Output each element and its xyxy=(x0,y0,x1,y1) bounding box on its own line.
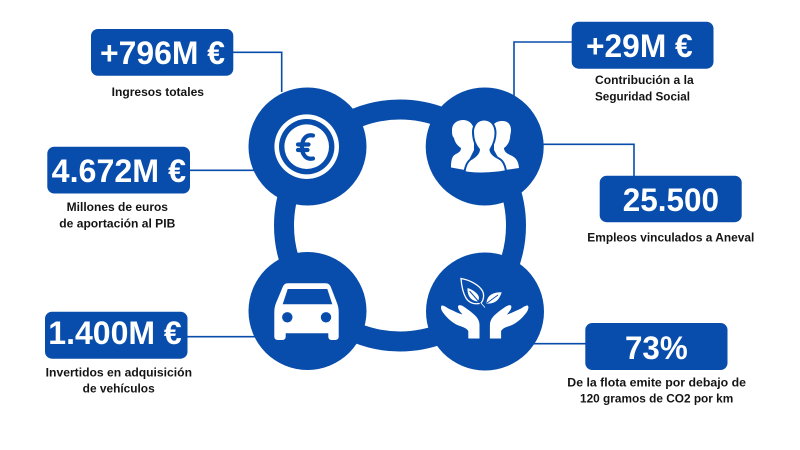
label: ingresos totales: Ingresos totales xyxy=(112,87,204,99)
connector: ingresos xyxy=(233,52,282,92)
left hand xyxy=(441,305,480,338)
central ring xyxy=(284,110,516,342)
label: seguridad social: Seguridad Social xyxy=(595,92,690,104)
icon: car xyxy=(248,252,366,370)
left person xyxy=(451,120,474,170)
right hand xyxy=(490,305,528,338)
label: vehiculos: de vehículos xyxy=(83,384,155,396)
label: vehiculos xyxy=(46,368,192,396)
stat box: ingresos totales: +796M € xyxy=(100,35,225,71)
stat box: empleos xyxy=(600,176,742,222)
center person xyxy=(464,120,506,173)
label: empleos: Empleos vinculados a Aneval xyxy=(587,233,754,245)
label: seguridad social xyxy=(595,75,694,104)
stat box: seguridad social xyxy=(572,22,714,69)
small leaf xyxy=(486,292,502,304)
connector: vehiculos xyxy=(187,336,256,338)
stat box: flota xyxy=(585,323,728,370)
label: PIB xyxy=(59,202,175,230)
label: PIB: de aportación al PIB xyxy=(59,218,175,230)
stat box: vehiculos: 1.400M € xyxy=(48,315,182,351)
label: flota: De la flota emite por debajo de xyxy=(567,378,746,390)
connector: seguridad social xyxy=(514,42,572,97)
stat box: empleos: 25.500 xyxy=(623,182,719,218)
right person xyxy=(494,121,519,170)
stat box: flota: 73% xyxy=(625,330,688,366)
stat box: PIB: 4.672M € xyxy=(52,153,186,189)
icon: euro coin xyxy=(248,88,366,206)
label: seguridad social: Contribución a la xyxy=(595,75,694,87)
connector: empleos xyxy=(542,144,634,176)
label: flota: 120 gramos de CO2 por km xyxy=(580,394,733,406)
stat box: ingresos totales xyxy=(91,29,233,76)
label: vehiculos: Invertidos en adquisición xyxy=(46,368,192,380)
icon: hands and leaves xyxy=(426,252,544,370)
label: PIB: Millones de euros xyxy=(67,202,168,214)
connector: PIB xyxy=(190,169,256,171)
large leaf xyxy=(461,278,484,304)
icon: people xyxy=(426,88,544,206)
stat box: seguridad social: +29M € xyxy=(586,28,693,64)
connector: flota xyxy=(530,343,586,345)
label: flota xyxy=(567,378,746,406)
